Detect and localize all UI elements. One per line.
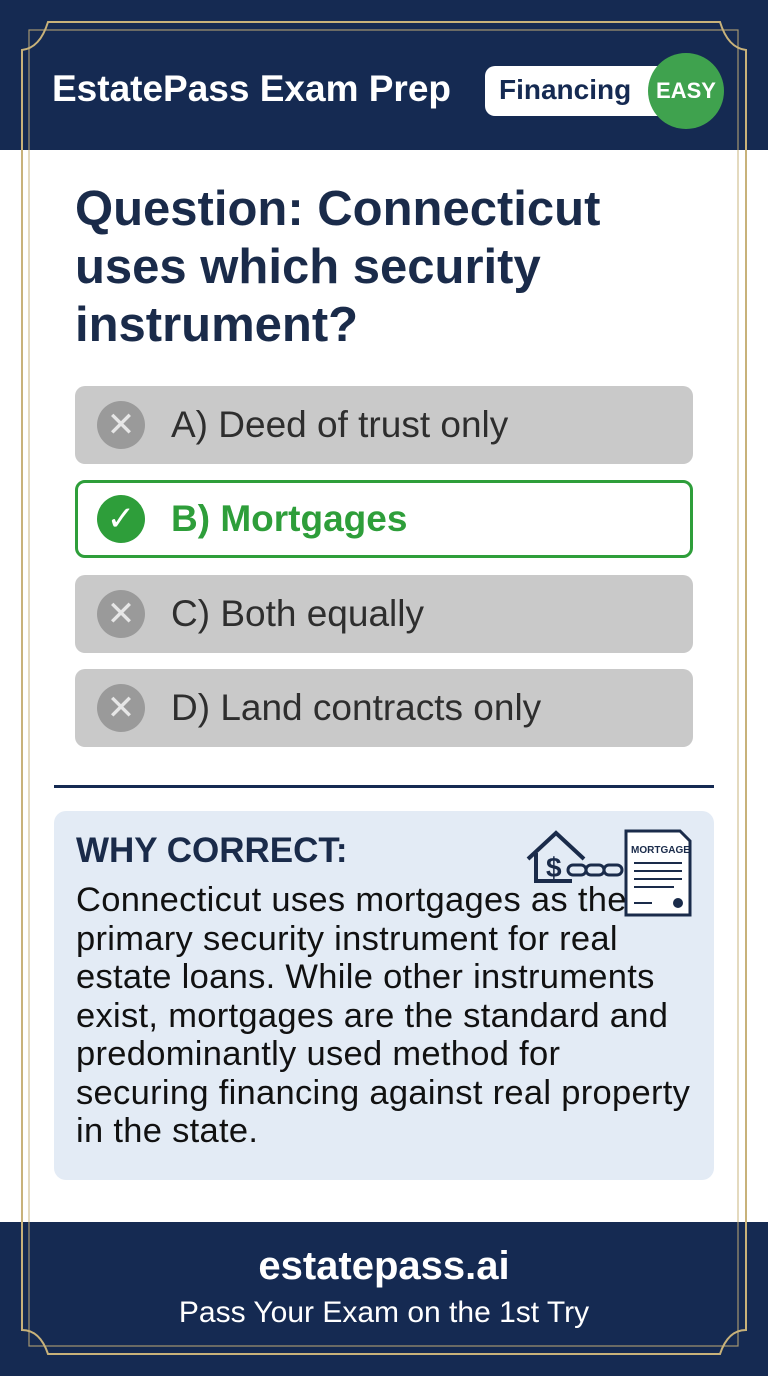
category badge — [485, 66, 675, 116]
category badge: Financing — [499, 74, 631, 105]
option B correct: ✓ — [107, 500, 135, 538]
footer site name: estatepass.ai — [258, 1244, 510, 1288]
difficulty badge: EASY — [656, 78, 716, 103]
difficulty badge — [648, 53, 724, 129]
explanation text — [76, 881, 690, 1150]
option D — [75, 669, 693, 747]
option C: C) Both equally — [171, 593, 424, 634]
icon: house chained to mortgage: $ — [546, 852, 562, 883]
explanation text: Connecticut uses mortgages as the — [76, 881, 627, 919]
option D: D) Land contracts only — [171, 687, 541, 728]
icon: house chained to mortgage: MORTGAGE — [631, 845, 690, 856]
question: instrument? — [75, 298, 358, 352]
option A: A) Deed of trust only — [171, 404, 508, 445]
option A — [75, 386, 693, 464]
explanation text: estate loans. While other instruments — [76, 958, 655, 996]
explanation text: securing financing against real property — [76, 1074, 690, 1112]
option C: ✕ — [107, 595, 135, 633]
option B correct — [75, 480, 693, 558]
option B correct: B) Mortgages — [171, 498, 407, 539]
explanation text: in the state. — [76, 1112, 258, 1150]
option A: ✕ — [107, 406, 135, 444]
option C — [75, 575, 693, 653]
icon: house chained to mortgage — [526, 830, 692, 916]
explanation heading: WHY CORRECT: — [76, 831, 348, 870]
explanation text: predominantly used method for — [76, 1035, 560, 1073]
question: uses which security — [75, 240, 541, 294]
explanation text: primary security instrument for real — [76, 920, 618, 958]
explanation text: exist, mortgages are the standard and — [76, 996, 668, 1034]
explanation panel — [54, 811, 714, 1180]
footer band — [0, 1222, 768, 1376]
footer tagline: Pass Your Exam on the 1st Try — [179, 1296, 589, 1329]
question — [75, 182, 600, 352]
question: Question: Connecticut — [75, 182, 600, 236]
header band — [0, 0, 768, 150]
option D: ✕ — [107, 689, 135, 727]
title: EstatePass Exam Prep — [52, 68, 451, 109]
